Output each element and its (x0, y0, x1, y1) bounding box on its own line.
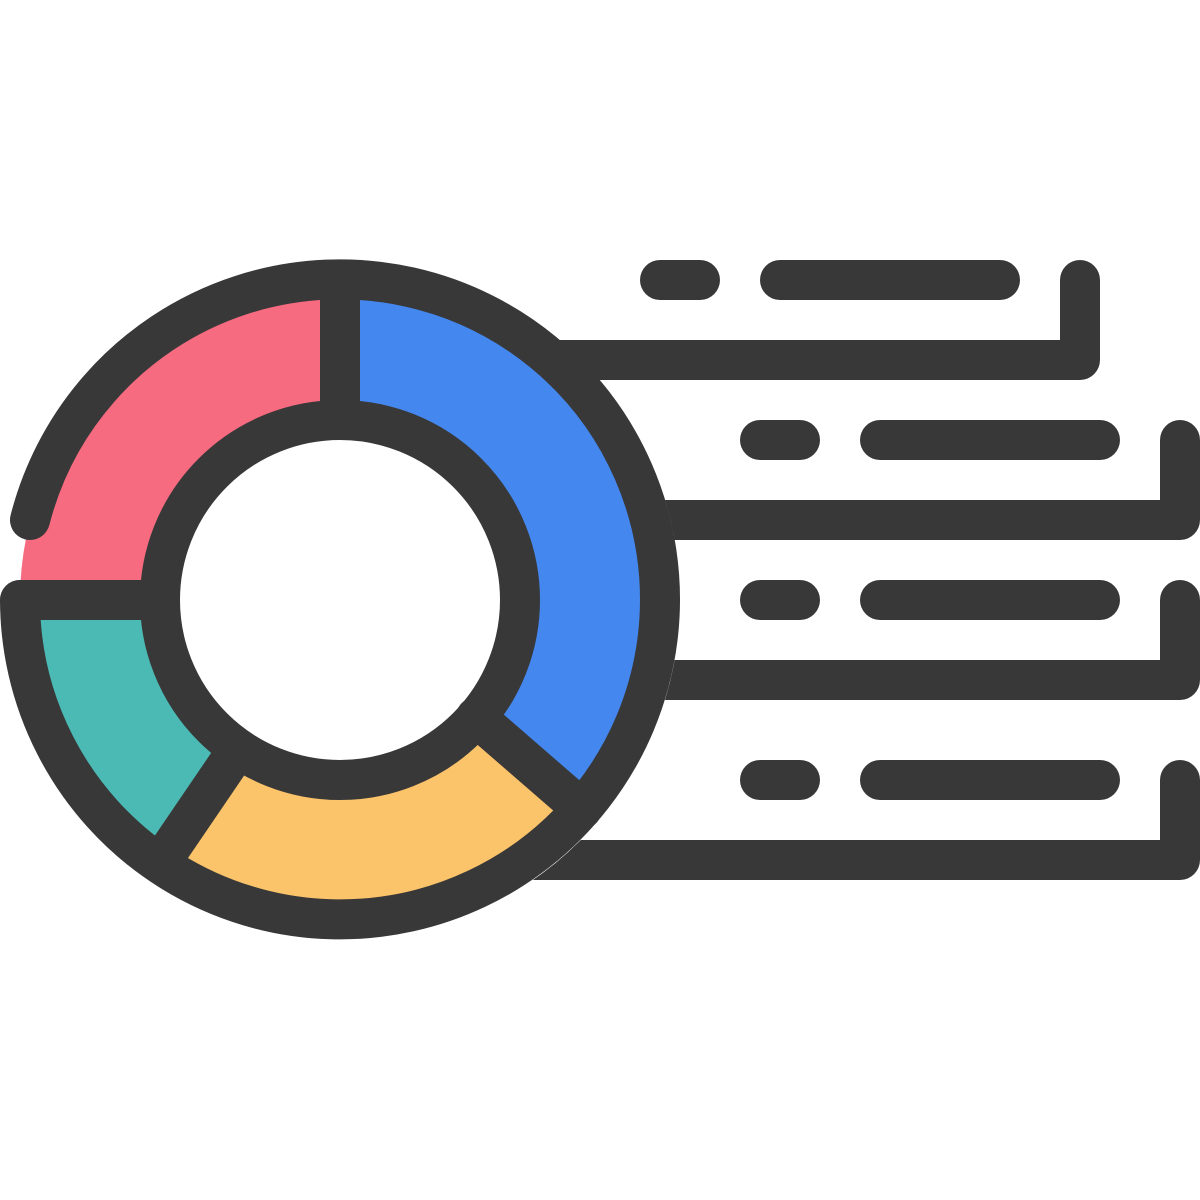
segment: teal (40, 620, 211, 836)
dividers (320, 280, 360, 420)
icon: donut chart with legend rows (0, 259, 1200, 940)
segment: yellow (188, 745, 554, 900)
row 3 (400, 600, 1180, 680)
segments (20, 300, 640, 900)
donut chart (0, 259, 680, 940)
segment: pink (20, 300, 320, 580)
row 1 (400, 280, 1080, 360)
row 2 (400, 440, 1180, 520)
legend rows (400, 280, 1180, 860)
outer arc (20, 279, 660, 919)
segment: blue (360, 300, 640, 780)
row 4 (400, 780, 1180, 860)
